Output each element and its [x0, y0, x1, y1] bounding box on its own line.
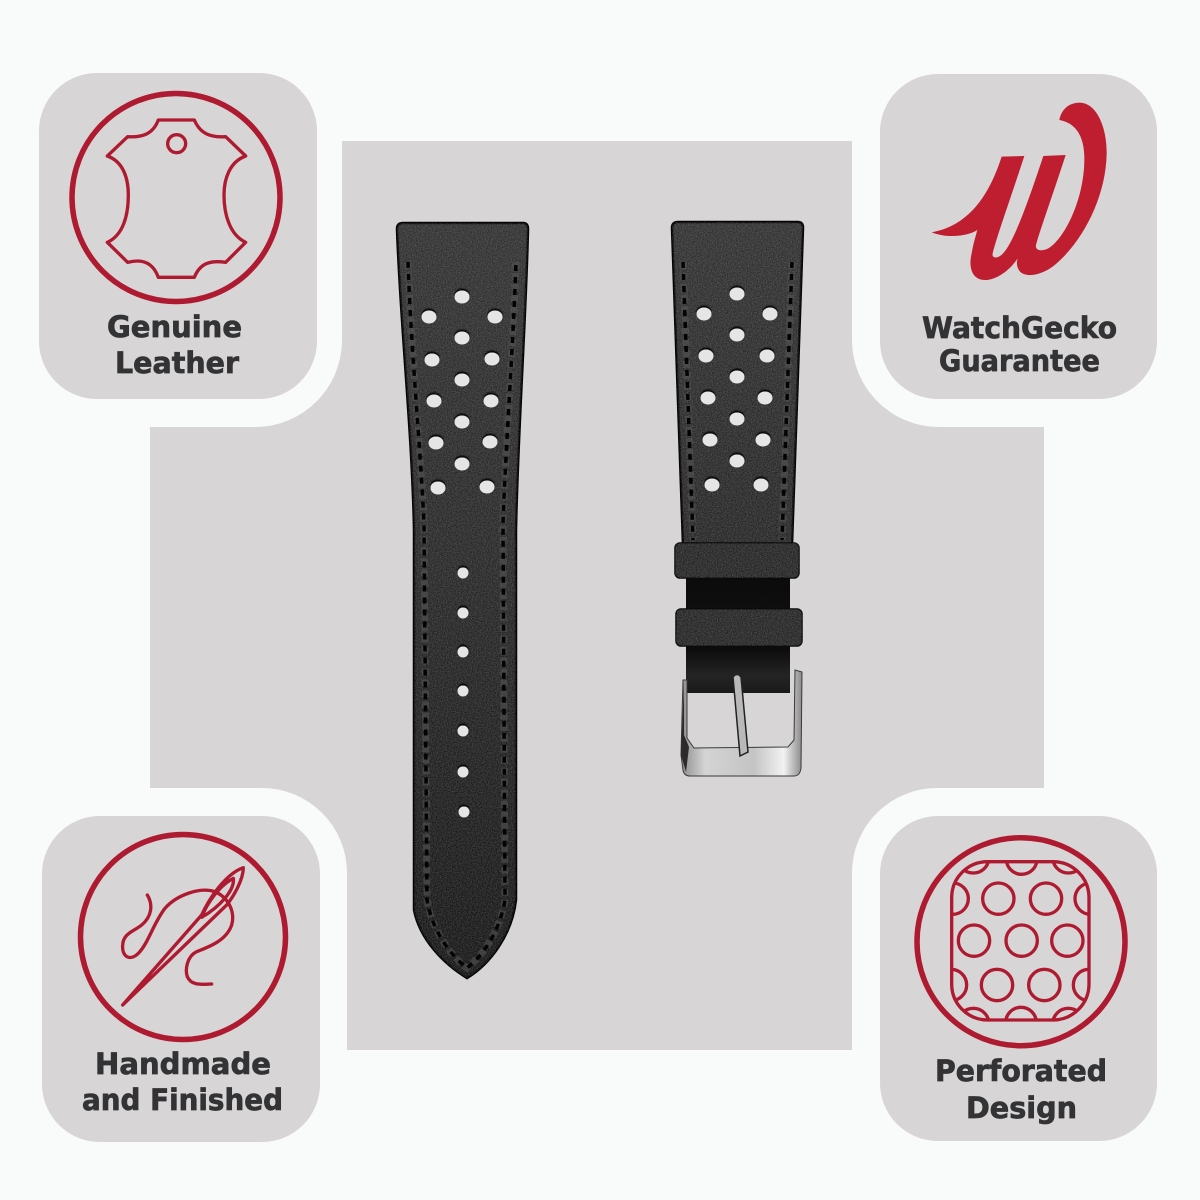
left strap: long perforated piece [390, 220, 535, 982]
icon: needle and thread [80, 834, 286, 1040]
label: Genuine Leather: Genuine [107, 310, 242, 344]
icon: WatchGecko W logo [932, 103, 1107, 280]
card: WatchGecko guarantee [880, 74, 1157, 399]
label: Perforated Design [935, 1054, 1107, 1125]
central backdrop panel [150, 141, 1044, 1050]
icon: perforated pattern [917, 838, 1125, 1046]
strap shadow section [686, 576, 790, 693]
keeper grain [675, 543, 802, 646]
label: Genuine Leather [107, 310, 242, 380]
label: WatchGecko Guarantee: WatchGecko [922, 311, 1117, 345]
right strap: buckle piece [668, 220, 808, 693]
label: Handmade and Finished: and Finished [82, 1083, 283, 1117]
icon: leather hide [72, 94, 280, 302]
label: Genuine Leather: Leather [115, 346, 240, 380]
label: WatchGecko Guarantee [922, 311, 1117, 378]
label: Handmade and Finished: Handmade [95, 1047, 271, 1081]
label: Perforated Design: Perforated [935, 1054, 1107, 1088]
card: genuine leather [39, 73, 317, 399]
label: WatchGecko Guarantee: Guarantee [939, 344, 1100, 378]
keeper loop 2 [676, 609, 802, 646]
label: Perforated Design: Design [966, 1091, 1077, 1125]
buckle [681, 670, 802, 776]
keeper loop 1 [675, 543, 799, 578]
card: handmade and finished [42, 816, 320, 1142]
card: perforated design [880, 816, 1157, 1141]
label: Handmade and Finished [82, 1047, 283, 1117]
